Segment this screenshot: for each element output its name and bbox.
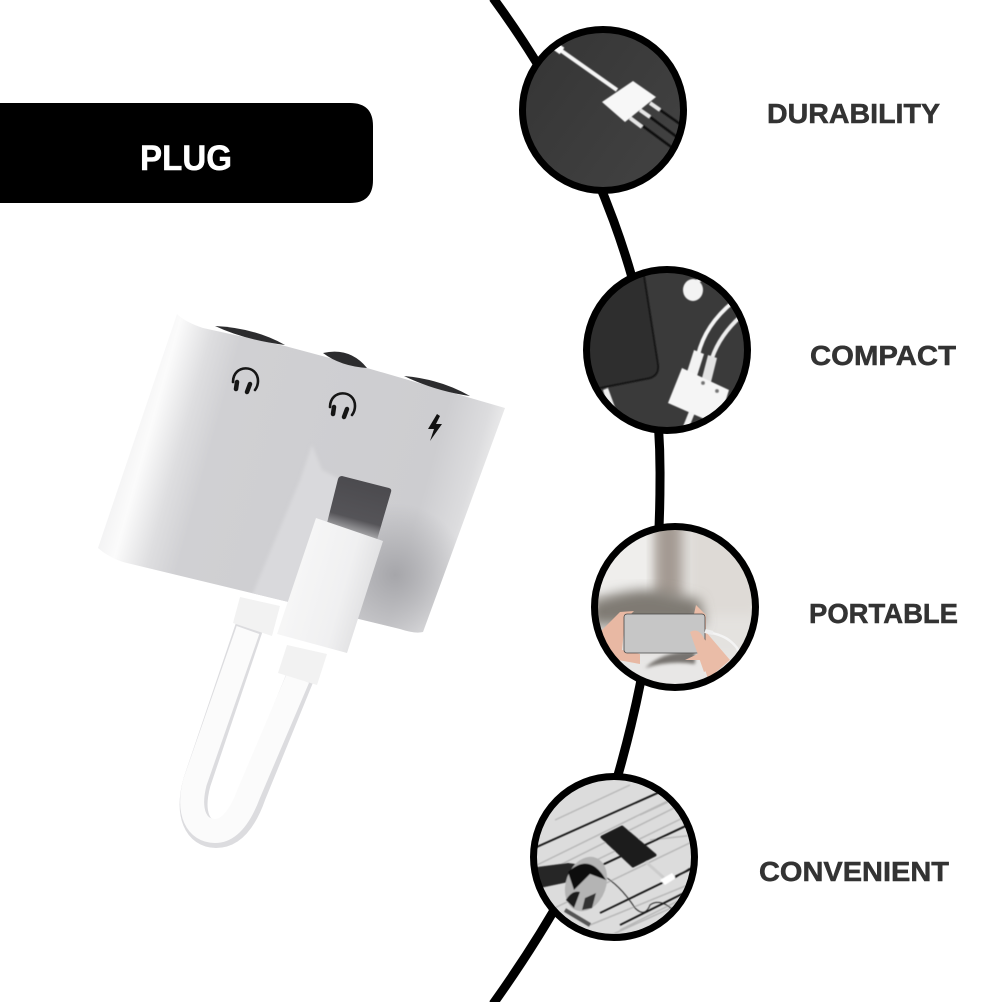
right strain relief [278,645,327,685]
label: compact: COMPACT [810,340,956,371]
label: portable: PORTABLE [809,598,958,629]
banner: PLUG: PLUG [140,139,232,178]
connector head [277,518,383,653]
feature: durability [522,30,690,190]
timeline arc [493,0,660,1002]
feature: compact [580,270,748,432]
icon: lightning bolt [428,414,442,441]
feature: portable [590,520,760,695]
lightning metal tip [326,476,391,540]
banner: PLUG [0,103,373,203]
label: durability: DURABILITY [767,98,940,129]
port slots [215,326,470,396]
icon: headphones right [330,393,355,417]
product photo: three-port adapter [98,314,505,834]
feature: convenient [530,776,700,940]
adapter body [98,314,505,650]
label: convenient: CONVENIENT [759,856,949,887]
left strain relief [233,597,280,636]
adapter cable loop [192,625,301,834]
icon: headphones left [233,368,258,392]
